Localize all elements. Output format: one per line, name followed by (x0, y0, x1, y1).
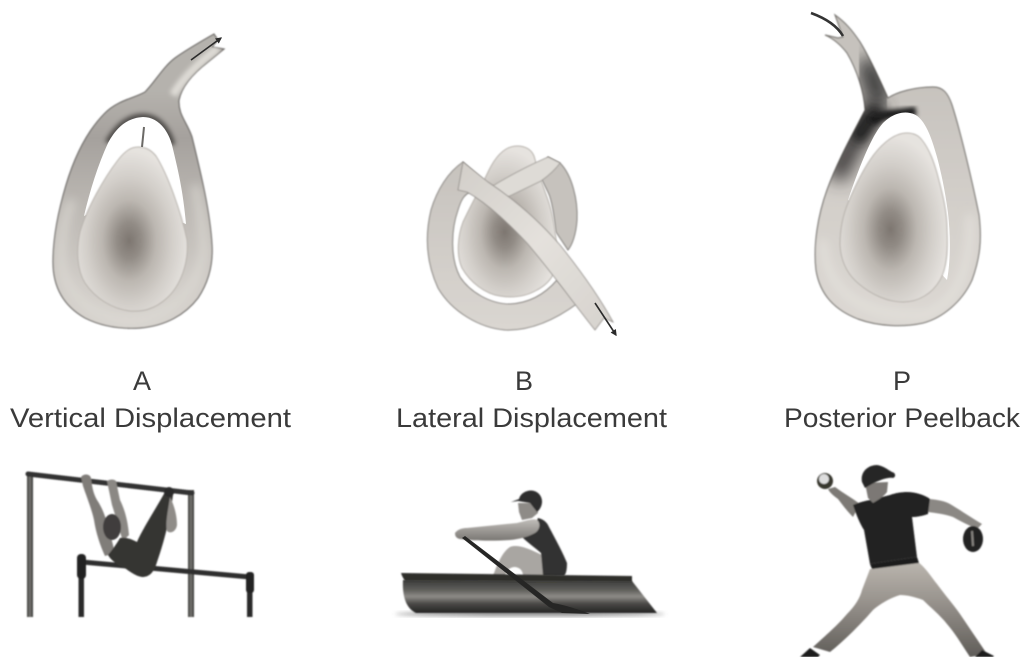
pants (813, 562, 987, 657)
arrow: upward displacement (191, 38, 221, 60)
glenoid (840, 133, 947, 302)
cap (862, 465, 895, 488)
label: B: B (515, 366, 533, 396)
belt (870, 557, 919, 569)
panel: P posterior peelback labrum diagram (811, 13, 980, 326)
displaced labral band (458, 162, 613, 330)
panel: A vertical displacement labrum diagram (53, 34, 224, 328)
glove (963, 526, 983, 552)
arrow: lateral displacement (595, 303, 616, 335)
label: Vertical Displacement: Vertical Displacement (10, 403, 292, 433)
labrum ring (427, 162, 578, 330)
arrow: peelback (811, 13, 843, 36)
torn strip over glenoid (488, 157, 560, 203)
throwing arm and ball (817, 473, 860, 517)
gymnast body (81, 474, 177, 577)
label: Lateral Displacement: Lateral Displacement (396, 403, 668, 433)
shoes (800, 648, 994, 657)
oar (462, 536, 590, 614)
glenoid (78, 147, 187, 311)
gap between labrum and glenoid (848, 113, 950, 280)
torso (853, 492, 930, 564)
illustration: baseball pitcher (800, 465, 994, 657)
boat hull (403, 580, 657, 613)
glenoid (458, 146, 557, 297)
illustration: gymnast on parallel bars (27, 473, 254, 617)
illustration: rower in boat (395, 491, 665, 616)
label: A: A (133, 366, 151, 396)
boat gunwale (401, 573, 632, 582)
labrum ring with dark peel region (815, 15, 980, 326)
label: Posterior Peelback: Posterior Peelback (784, 403, 1021, 433)
low bar and posts (77, 490, 254, 617)
right labrum strip (541, 157, 577, 250)
neck and face (865, 482, 888, 503)
boat shadow (395, 612, 665, 616)
panel: B lateral displacement labrum diagram (427, 146, 616, 335)
glove arm (928, 499, 982, 529)
label: P: P (893, 366, 911, 396)
gap between labrum and glenoid (84, 117, 186, 224)
icon: superior spike (142, 127, 144, 147)
high bar and post (27, 473, 192, 617)
rower (455, 491, 567, 576)
labrum ring with biceps tail (53, 34, 224, 328)
